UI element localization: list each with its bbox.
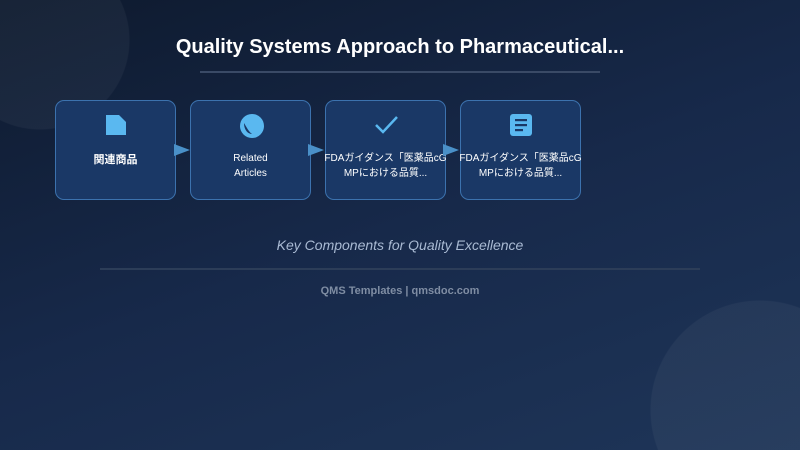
label 3: MPにおける品質...: [344, 168, 427, 179]
arrow 2: [308, 144, 324, 156]
icon: check: [375, 116, 398, 134]
footer: QMS Templates | qmsdoc.com: [321, 285, 479, 297]
icon: file: [106, 115, 126, 135]
panel: step 2: [190, 100, 311, 200]
label 4: FDAガイダンス「医薬品cG: [459, 153, 582, 164]
title: Quality Systems Approach to Pharmaceutical...: [176, 36, 624, 58]
icon: globe: [240, 114, 264, 138]
panel: step 1: [55, 100, 176, 200]
label 2: [233, 153, 268, 179]
label 3: FDAガイダンス「医薬品cG: [324, 153, 447, 164]
panel: step 3: [325, 100, 446, 200]
arrow 1: [174, 144, 190, 156]
subtitle: Key Components for Quality Excellence: [277, 237, 523, 253]
panel: step 4: [460, 100, 581, 200]
label 1: 関連商品: [94, 154, 138, 166]
label 2: Related: [233, 153, 268, 164]
label 2: Articles: [234, 168, 267, 179]
label 4: MPにおける品質...: [479, 168, 562, 179]
label 4: [459, 152, 582, 179]
icon: document: [510, 114, 532, 136]
arrow 3: [443, 144, 459, 156]
label 3: [324, 152, 447, 179]
